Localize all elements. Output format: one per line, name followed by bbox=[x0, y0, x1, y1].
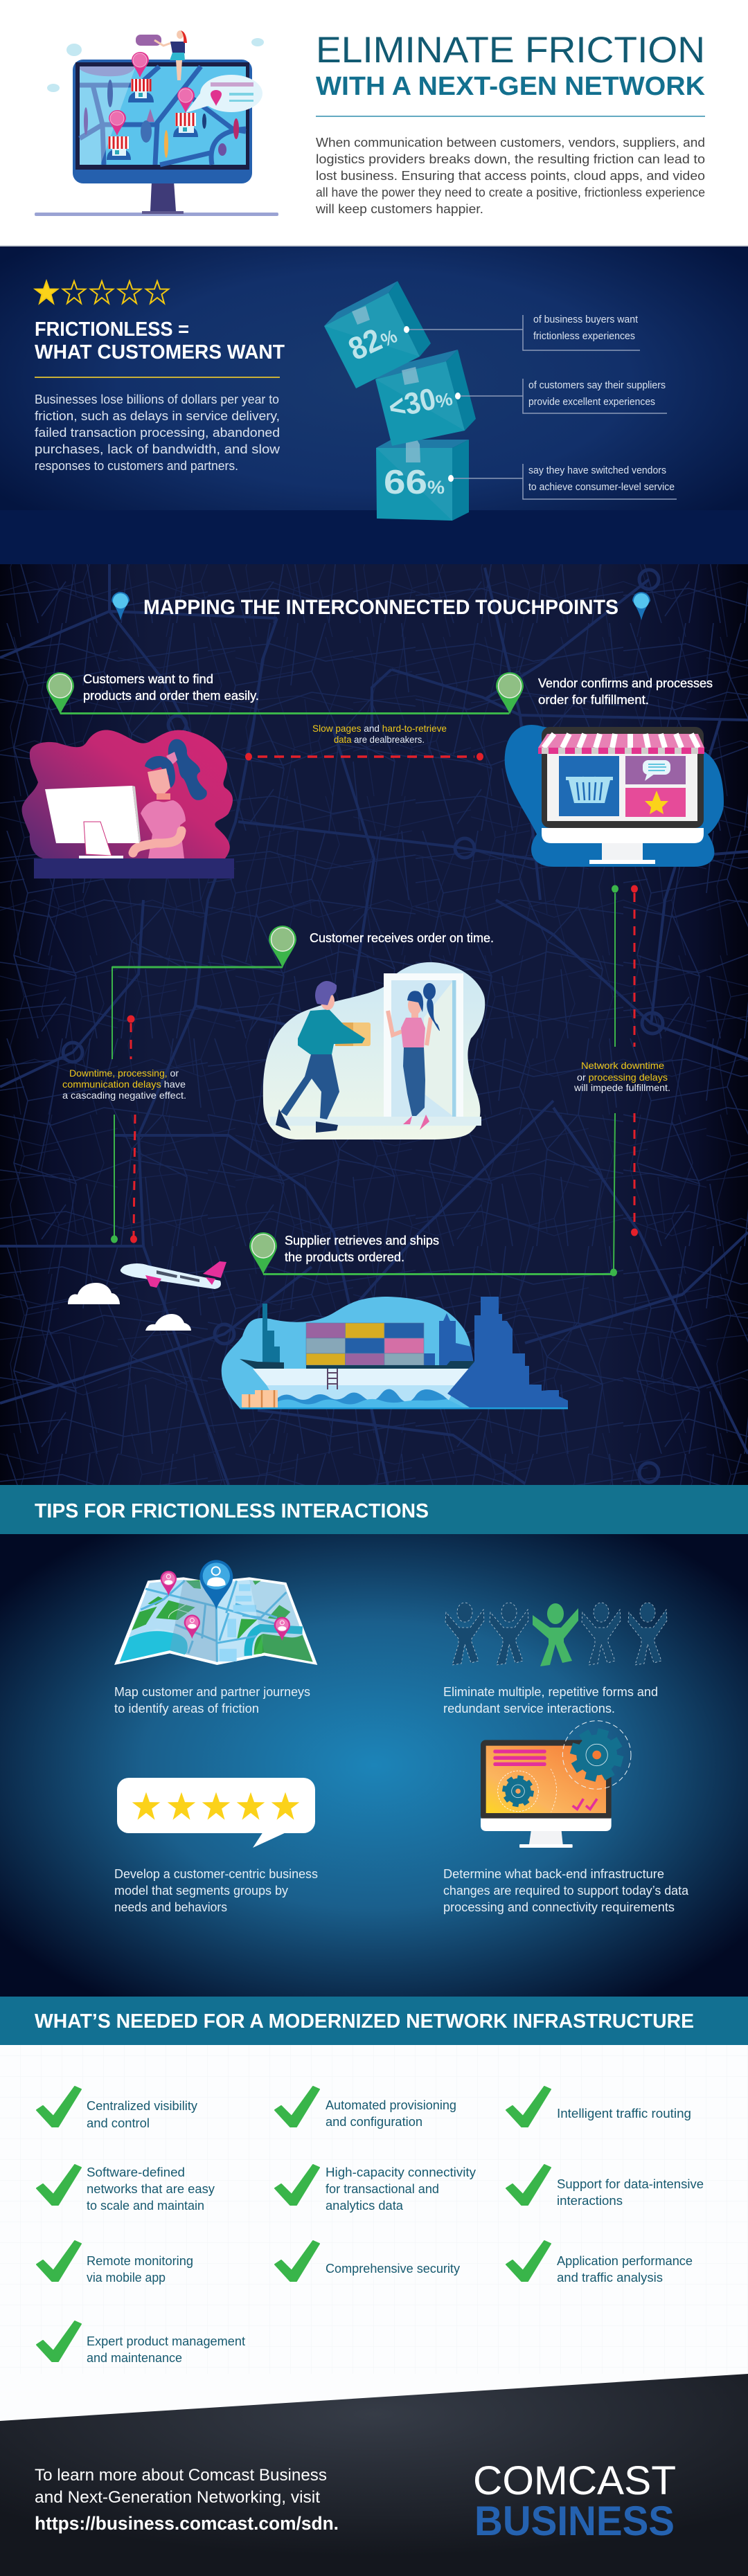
panel: tips bbox=[0, 1534, 748, 1997]
call to action bbox=[35, 2466, 339, 2534]
heading: FRICTIONLESS = bbox=[35, 318, 189, 341]
clouds bbox=[47, 38, 264, 92]
text: supplier step: Supplier retrieves and ships bbox=[285, 1234, 439, 1248]
crates bbox=[242, 1390, 278, 1407]
icon: row of people bbox=[445, 1603, 667, 1666]
intro paragraph: logistics providers breaks down, the resulting friction can lead to bbox=[316, 152, 705, 166]
callout 82%: frictionless experiences bbox=[533, 330, 635, 342]
text: supplier step bbox=[285, 1234, 439, 1264]
text: downtime cascading: Downtime, processing, or bbox=[69, 1068, 179, 1079]
checklist items: analytics data bbox=[326, 2199, 404, 2213]
icon: green pin customers bbox=[46, 672, 74, 714]
header illustration: monitor with map bbox=[35, 30, 278, 216]
icon: green pin vendor bbox=[496, 672, 524, 714]
illustration: vendor storefront monitor bbox=[505, 725, 724, 867]
icon: blue pin right bbox=[632, 592, 650, 620]
heading bbox=[35, 318, 285, 363]
icon: green pin supplier bbox=[249, 1232, 277, 1275]
call to action: To learn more about Comcast Business bbox=[35, 2466, 327, 2485]
checklist items: and traffic analysis bbox=[557, 2271, 663, 2285]
text: dealbreakers bbox=[312, 723, 447, 745]
body text: failed transaction processing, abandoned bbox=[35, 426, 280, 440]
intro paragraph: When communication between customers, vendors, suppliers, and bbox=[316, 136, 705, 150]
stat box <30% bbox=[375, 350, 476, 446]
checkmarks bbox=[37, 2087, 551, 2361]
illustration: cargo ship and skyline bbox=[222, 1297, 568, 1409]
checklist items: Centralized visibility bbox=[87, 2099, 197, 2113]
blue location pin bbox=[199, 1560, 233, 1610]
text: downtime cascading bbox=[62, 1068, 186, 1101]
checklist items: Software-defined bbox=[87, 2165, 185, 2179]
checklist items: for transactional and bbox=[326, 2182, 439, 2196]
text: network downtime: or processing delays bbox=[577, 1072, 668, 1083]
star panel bbox=[625, 788, 686, 817]
door bbox=[384, 973, 463, 1117]
callout 82%: of business buyers want bbox=[533, 314, 639, 325]
stat box <30%: <30 bbox=[386, 381, 439, 426]
intro paragraph: lost business. Ensuring that access points, cloud apps, and video bbox=[316, 169, 705, 183]
green person bbox=[533, 1603, 578, 1666]
text: customers step: Customers want to find bbox=[83, 672, 213, 686]
text: vendor step: Vendor confirms and processes bbox=[538, 676, 713, 690]
icon: cloud large bbox=[68, 1283, 120, 1304]
text: vendor step bbox=[538, 676, 713, 707]
text: downtime cascading: a cascading negative effect. bbox=[62, 1090, 186, 1101]
logo bbox=[473, 2458, 676, 2544]
text: vendor step: order for fulfillment. bbox=[538, 693, 649, 707]
logo: COMCAST bbox=[473, 2458, 676, 2503]
text: downtime cascading: communication delays have bbox=[62, 1079, 186, 1090]
basket panel bbox=[559, 756, 619, 816]
stores bbox=[107, 79, 198, 160]
connector: customer to supplier green line bbox=[111, 966, 283, 1243]
connector: customer to vendor bbox=[60, 712, 509, 714]
connector: customer to supplier red dashed line bbox=[127, 1015, 137, 1243]
body text: Businesses lose billions of dollars per year to bbox=[35, 393, 279, 406]
text: network downtime: will impede fulfillment. bbox=[573, 1082, 670, 1093]
intro paragraph bbox=[315, 136, 705, 216]
stat box 82%: % bbox=[377, 325, 400, 351]
sitting woman bbox=[136, 30, 187, 80]
containers bbox=[306, 1323, 424, 1365]
icon: airplane bbox=[121, 1261, 226, 1289]
awning bbox=[538, 734, 704, 754]
rating stars bbox=[35, 281, 168, 303]
text: determine infrastructure: Determine what back-end infrastructure bbox=[443, 1867, 664, 1881]
intro paragraph: will keep customers happier. bbox=[315, 202, 483, 216]
checklist items: to scale and maintain bbox=[87, 2199, 204, 2213]
body text: friction, such as delays in service delivery, bbox=[35, 409, 280, 423]
panel: frictionless bbox=[0, 245, 748, 564]
banner: tips: TIPS FOR FRICTIONLESS INTERACTIONS bbox=[35, 1500, 429, 1522]
call to action: and Next-Generation Networking, visit bbox=[35, 2488, 320, 2507]
text: map journeys bbox=[114, 1685, 310, 1715]
connector: red dashed top bbox=[245, 753, 483, 760]
woman at door bbox=[388, 983, 440, 1130]
stat box 66%: % bbox=[427, 477, 445, 498]
text: map journeys: Map customer and partner journeys bbox=[114, 1685, 310, 1699]
speech bubble bbox=[186, 75, 262, 113]
intro paragraph: all have the power they need to create a positive, frictionless experience bbox=[316, 186, 705, 199]
text: customer-centric bbox=[114, 1867, 318, 1914]
title bbox=[316, 30, 706, 101]
stat box 82%: 82 bbox=[343, 321, 387, 367]
checklist items: interactions bbox=[557, 2194, 623, 2208]
chat panel bbox=[625, 756, 686, 784]
banner: modernized network bbox=[0, 1997, 748, 2045]
checklist items: Support for data-intensive bbox=[557, 2177, 704, 2191]
connector: vendor to supplier green line bbox=[263, 885, 618, 1277]
checklist items: Application performance bbox=[557, 2254, 693, 2268]
panel: footer bbox=[0, 2374, 748, 2576]
text: determine infrastructure: changes are required to support today’s data bbox=[443, 1884, 689, 1898]
delivery man bbox=[276, 981, 371, 1133]
checklist items: and configuration bbox=[326, 2115, 422, 2129]
icon: green pin customer receives bbox=[269, 926, 296, 968]
stat box 66% bbox=[376, 440, 469, 521]
woman figure bbox=[133, 739, 207, 858]
body text: purchases, lack of bandwidth, and slow bbox=[35, 442, 280, 456]
illustration: delivery at door bbox=[263, 962, 485, 1140]
logo: BUSINESS bbox=[474, 2498, 675, 2544]
panel: checklist bbox=[0, 2045, 748, 2422]
text: dealbreakers: Slow pages and hard-to-retrieve bbox=[312, 723, 447, 734]
text: customers step: products and order them easily. bbox=[83, 689, 259, 703]
illustration: woman at computer bbox=[22, 730, 234, 879]
text: network downtime: Network downtime bbox=[581, 1060, 664, 1071]
text: eliminate forms: Eliminate multiple, repetitive forms and bbox=[443, 1685, 658, 1699]
map pins bbox=[109, 52, 195, 136]
text: determine infrastructure bbox=[443, 1867, 689, 1914]
checklist items: Automated provisioning bbox=[326, 2098, 456, 2112]
banner: modernized network: WHAT’S NEEDED FOR A MODERNIZED NETWORK INFRASTRUCTURE bbox=[35, 2010, 694, 2033]
body text bbox=[35, 393, 280, 473]
checklist items: and control bbox=[87, 2116, 150, 2130]
body text: responses to customers and partners. bbox=[35, 459, 238, 473]
checklist items: Comprehensive security bbox=[326, 2262, 460, 2276]
text: eliminate forms bbox=[443, 1685, 658, 1715]
callout 30% bbox=[455, 379, 667, 413]
icon: monitor with gears bbox=[481, 1721, 631, 1848]
checklist items: Remote monitoring bbox=[87, 2254, 193, 2268]
icon: cloud small bbox=[145, 1314, 191, 1331]
stat box 66%: 66 bbox=[384, 464, 427, 501]
title: WITH A NEXT-GEN NETWORK bbox=[316, 72, 706, 101]
text: customer-centric: model that segments groups by bbox=[114, 1884, 288, 1898]
stat box <30%: % bbox=[434, 388, 454, 412]
text: dealbreakers: data are dealbreakers. bbox=[334, 734, 425, 745]
icon: blue pin left bbox=[112, 592, 130, 620]
text: eliminate forms: redundant service interactions. bbox=[443, 1702, 615, 1715]
callout 66% bbox=[448, 464, 677, 499]
checklist items: networks that are easy bbox=[87, 2182, 215, 2196]
text: customer receives: Customer receives order on time. bbox=[310, 931, 494, 945]
checklist items: High-capacity connectivity bbox=[326, 2165, 476, 2179]
desk bbox=[34, 858, 234, 879]
panel: mapping touchpoints bbox=[0, 564, 748, 1485]
checklist items: Expert product management bbox=[87, 2334, 245, 2348]
icon: review bubble bbox=[117, 1778, 315, 1848]
section heading: MAPPING THE INTERCONNECTED TOUCHPOINTS bbox=[143, 596, 618, 619]
small gear bbox=[498, 1771, 538, 1812]
text: customers step bbox=[83, 672, 259, 703]
callout 66%: say they have switched vendors bbox=[528, 465, 666, 476]
icon: folded map bbox=[114, 1560, 317, 1665]
text: determine infrastructure: processing and connectivity requirements bbox=[443, 1900, 675, 1914]
checklist items: via mobile app bbox=[87, 2271, 166, 2285]
large gear bbox=[562, 1721, 631, 1789]
callout 30%: provide excellent experiences bbox=[528, 396, 655, 408]
checklist items bbox=[87, 2098, 704, 2365]
pink location pins bbox=[161, 1571, 290, 1641]
heading: WHAT CUSTOMERS WANT bbox=[35, 341, 285, 363]
checklist items: and maintenance bbox=[87, 2351, 182, 2365]
skyline bbox=[447, 1297, 568, 1407]
computer bbox=[45, 786, 141, 858]
ship hull bbox=[240, 1359, 475, 1403]
connector: vendor to supplier red dashed line bbox=[631, 885, 638, 1236]
waves bbox=[277, 1389, 457, 1407]
callout 82% bbox=[404, 314, 640, 350]
stat box 82% bbox=[324, 281, 431, 388]
text: customer-centric: Develop a customer-centric business bbox=[114, 1867, 318, 1881]
call to action: https://business.comcast.com/sdn. bbox=[35, 2513, 339, 2534]
checklist items: Intelligent traffic routing bbox=[557, 2107, 691, 2120]
towers bbox=[262, 1304, 280, 1364]
text: network downtime bbox=[573, 1060, 670, 1093]
text: supplier step: the products ordered. bbox=[285, 1250, 404, 1264]
text: customer-centric: needs and behaviors bbox=[114, 1900, 227, 1914]
title: ELIMINATE FRICTION bbox=[316, 30, 705, 71]
banner: tips bbox=[0, 1485, 748, 1534]
text: map journeys: to identify areas of friction bbox=[114, 1702, 259, 1715]
callout 30%: of customers say their suppliers bbox=[528, 379, 666, 391]
callout 66%: to achieve consumer-level service bbox=[528, 481, 675, 493]
